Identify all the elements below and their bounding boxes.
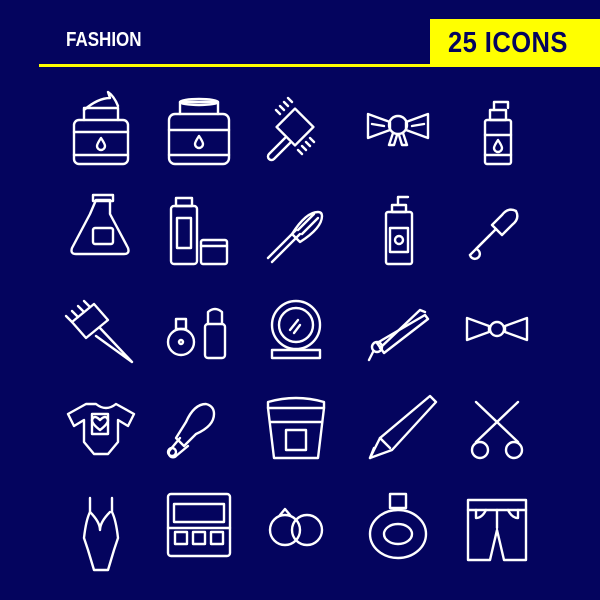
badge: 25 icons [430, 19, 600, 67]
title: FASHION [66, 29, 142, 51]
icon: jar [169, 99, 229, 164]
header underline [39, 64, 430, 67]
icon: compact mirror [272, 301, 320, 358]
icon: scissors [472, 402, 522, 458]
icon: paddle brush [268, 212, 322, 262]
icon: eyeshadow palette [168, 494, 230, 556]
icon: bottle and jar [171, 198, 227, 264]
icon: makeup brush [470, 210, 517, 259]
icon: tint comb [66, 301, 132, 362]
icon: hair brush [268, 98, 314, 160]
icon: nail polish [168, 404, 214, 457]
icon: perfume bottle round [370, 494, 426, 558]
icon: pump bottle [485, 102, 511, 164]
icon: swimsuit [84, 498, 118, 570]
icon: bow [368, 114, 428, 145]
icon: baby onesie [68, 404, 134, 454]
icon: perfume flask [72, 195, 128, 254]
icon: pencil brush [370, 396, 436, 458]
badge: 25 icons: 25 ICONS [448, 27, 568, 59]
icon: jar (large) [268, 398, 324, 458]
icon: rings [270, 509, 322, 545]
icon: shorts [468, 500, 526, 560]
icon: lotion pump [386, 197, 412, 264]
icon: hair straightener [369, 310, 428, 360]
icon: perfume and lipstick [168, 309, 225, 358]
icon: bow tie [467, 318, 527, 340]
icon: cream jar [74, 92, 128, 164]
